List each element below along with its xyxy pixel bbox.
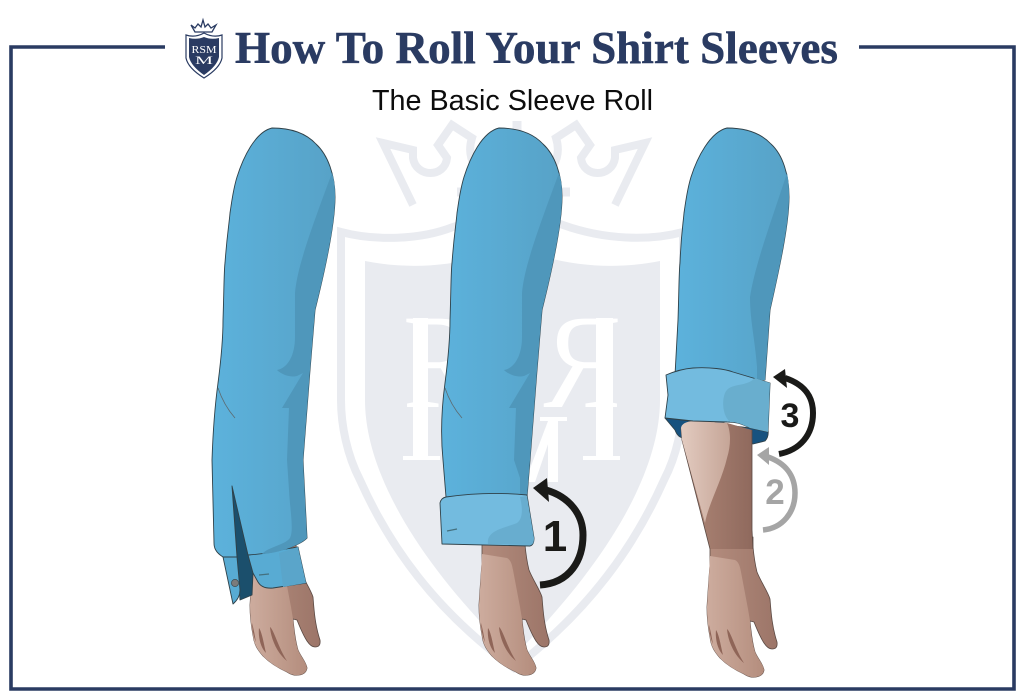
cuff shadow (723, 378, 770, 432)
arrow: step 3: 3 (781, 397, 799, 435)
watermark: shield band (341, 208, 683, 668)
arrow: step 3 (773, 369, 813, 454)
logo: monogram: M (195, 53, 214, 67)
rolled cuff (665, 368, 770, 432)
watermark: monogram: R (544, 288, 621, 437)
rolled cuff (440, 493, 534, 546)
subtitle: The Basic Sleeve Roll (372, 85, 653, 117)
watermark: monogram (403, 288, 621, 482)
watermark: crown cross (457, 121, 570, 200)
sleeve (442, 128, 562, 497)
forearm highlight (681, 421, 730, 523)
cuff stitch (447, 529, 457, 531)
sleeve shadow (262, 173, 335, 554)
title: How To Roll Your Shirt Sleeves (235, 23, 838, 73)
logo: monogram (192, 44, 217, 67)
cuff (223, 557, 240, 604)
figure 1: unrolled sleeve (212, 128, 335, 675)
logo: shield fill (189, 37, 219, 75)
logo: shield outline (186, 33, 222, 78)
slit placket (232, 486, 253, 600)
cuff button (231, 579, 239, 587)
logo: crown (191, 20, 216, 32)
watermark: shield fill (365, 245, 660, 656)
forearm (681, 421, 753, 549)
cuff band (248, 547, 306, 588)
sleeve (675, 128, 789, 380)
sleeve inner lining (665, 418, 768, 444)
sleeve crease (445, 388, 462, 418)
hand (479, 545, 549, 675)
logo: monogram: RSM (192, 44, 217, 56)
watermark: crest (341, 121, 683, 668)
sleeve crease (218, 388, 235, 418)
sleeve shadow (750, 173, 789, 380)
hand (707, 537, 777, 677)
sleeve shadow (504, 173, 562, 497)
watermark: crown (383, 125, 645, 205)
hand (250, 545, 320, 675)
arrow: step 2 (757, 447, 795, 530)
logo (186, 20, 222, 78)
arrow: step 1: 1 (543, 512, 567, 561)
watermark: monogram: R (403, 288, 480, 437)
arrow: step 1 (533, 478, 583, 585)
cuff shadow (488, 496, 534, 545)
sleeve (212, 128, 335, 557)
figure 3: second fold (665, 128, 789, 677)
figure 2: first fold (440, 128, 562, 675)
arrow: step 2: 2 (765, 473, 785, 512)
forearm outline (681, 428, 753, 549)
